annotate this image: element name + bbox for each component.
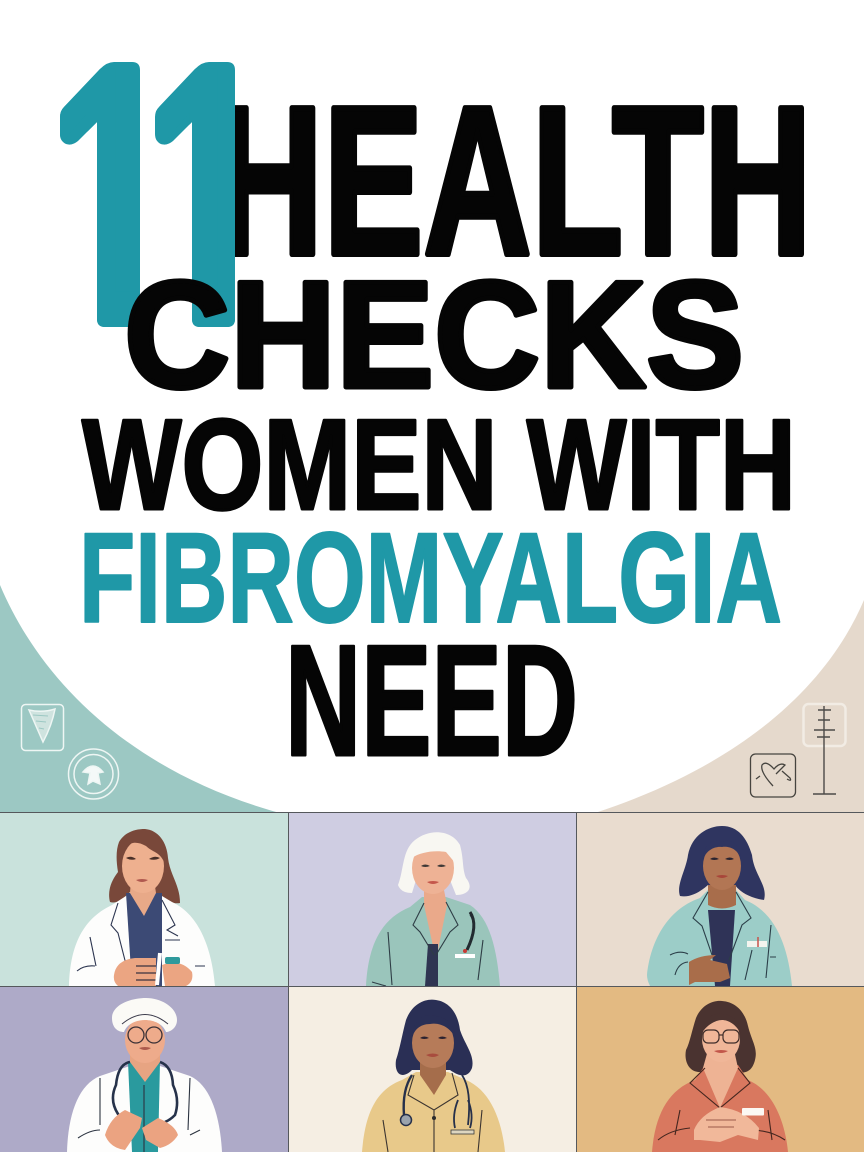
icon: double ring badge	[68, 749, 118, 799]
icon: measuring pole	[804, 704, 846, 794]
panel: doctor in coral coat with glasses	[652, 1001, 788, 1152]
title word: NEED: NEED	[285, 613, 578, 789]
icon: digestive tract in square	[22, 704, 64, 750]
corner panel: teal	[0, 585, 280, 813]
panel: white-haired doctor in teal coat	[366, 832, 500, 986]
panel: doctor in white coat holding bottle	[69, 829, 215, 986]
icon: heart sketch in square	[750, 754, 796, 797]
corner panel: beige	[595, 600, 864, 813]
title number: 11	[60, 62, 235, 327]
panel: doctor with white cap and stethoscope	[67, 998, 222, 1152]
panel: doctor in mint coat with badge	[647, 826, 792, 986]
panel: doctor in yellow top with stethoscope	[362, 1000, 505, 1152]
panel grid backgrounds	[0, 812, 864, 1152]
title word: CHECKS: CHECKS	[124, 250, 744, 420]
